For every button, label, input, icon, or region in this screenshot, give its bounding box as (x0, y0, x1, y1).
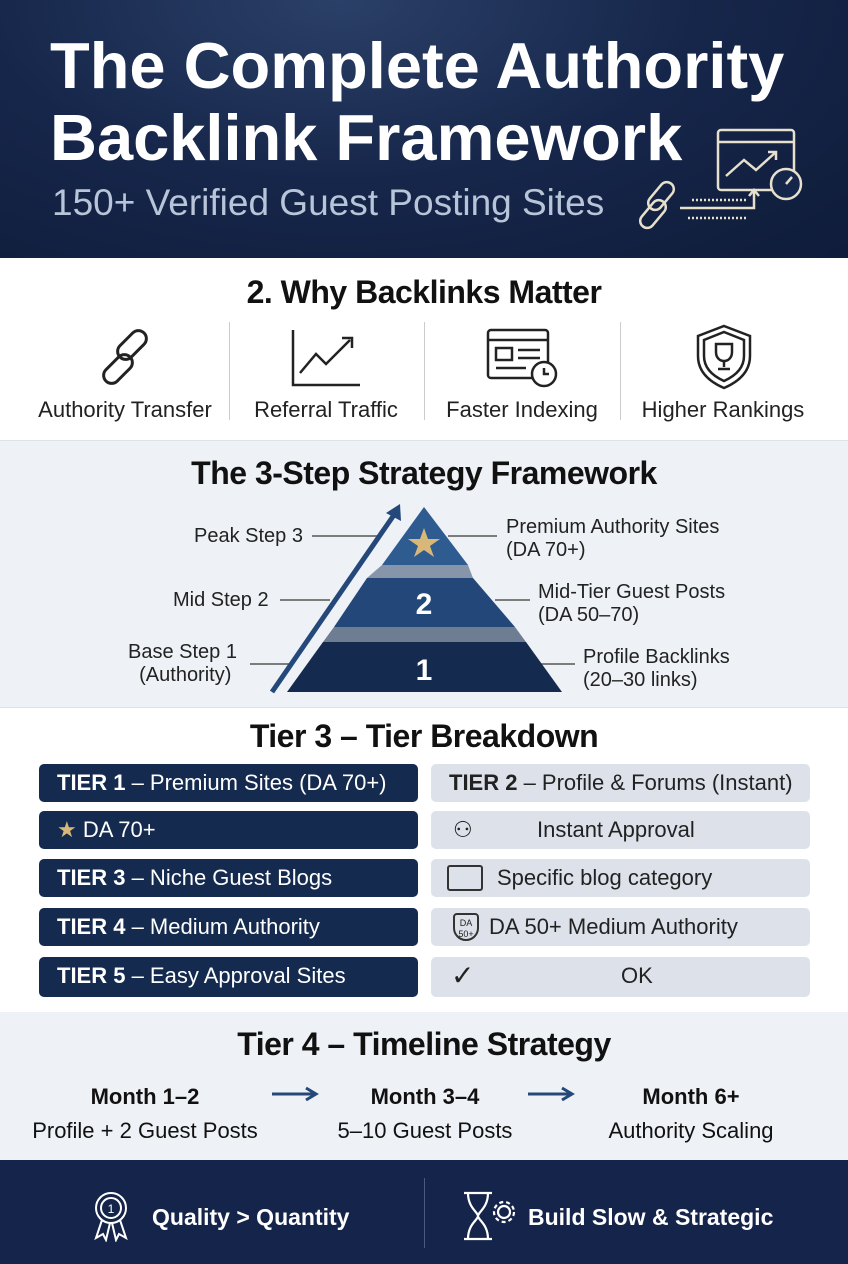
text: Instant Approval (537, 817, 695, 842)
pyramid labels right: Premium Authority Sites (506, 516, 719, 538)
text: ⚇ (453, 817, 473, 842)
text: Specific blog category (497, 865, 712, 890)
text: Mid-Tier Guest Posts (538, 581, 725, 603)
subtitle: 150+ Verified Guest Posting Sites (52, 182, 604, 223)
title (50, 29, 784, 174)
pyramid chart (250, 504, 575, 694)
text: Higher Rankings (642, 397, 804, 422)
header (0, 0, 848, 258)
heading: 2. Why Backlinks Matter (247, 274, 601, 310)
text: (DA 50–70) (538, 604, 639, 626)
icon: browser clock (486, 328, 558, 388)
text: Profile Backlinks (583, 646, 730, 668)
pyramid labels right: (DA 70+) (506, 539, 585, 561)
tier rows right: TIER 2 – Profile & Forums (Instant) (449, 770, 793, 795)
text: Faster Indexing (446, 397, 598, 422)
timeline steps: Profile + 2 Guest Posts (32, 1118, 258, 1143)
text: TIER 4 – Medium Authority (57, 914, 320, 939)
pyramid chart: 2 (416, 588, 432, 621)
title: The Complete Authority (50, 29, 784, 102)
icon: analytics with link (639, 128, 802, 230)
heading: tier breakdown: Tier 3 – Tier Breakdown (250, 718, 598, 754)
text: Base Step 1 (128, 641, 237, 663)
text: Mid Step 2 (173, 589, 269, 611)
footer text 1: Quality > Quantity (152, 1204, 349, 1230)
icon: hourglass gear (464, 1192, 516, 1240)
benefit labels: Authority Transfer (38, 397, 212, 422)
text: DA (460, 918, 472, 928)
text: OK (621, 963, 653, 988)
section: timeline: Month 6+ (642, 1084, 740, 1109)
text: (Authority) (139, 664, 231, 686)
text: 50+ (458, 929, 474, 939)
icon: link (102, 329, 148, 385)
section: timeline: Month 3–4 (371, 1084, 479, 1109)
text: TIER 5 – Easy Approval Sites (57, 963, 346, 988)
icon: chart (292, 330, 360, 386)
section: timeline: Authority Scaling (608, 1118, 774, 1143)
footer text 2: Build Slow & Strategic (528, 1204, 773, 1230)
section: timeline (0, 1012, 848, 1160)
section: 3-step strategy (0, 440, 848, 708)
section: why backlinks matter (0, 258, 848, 440)
icon: shield trophy (696, 324, 752, 390)
pyramid labels right (506, 516, 719, 561)
title: Backlink Framework (50, 101, 682, 174)
arrows (272, 1086, 575, 1102)
text: (20–30 links) (583, 669, 698, 691)
heading: Tier 4 – Timeline Strategy (237, 1026, 611, 1062)
text: ✓ (451, 960, 474, 991)
icon: medal (94, 1192, 128, 1242)
heading: The 3-Step Strategy Framework (191, 455, 657, 491)
text: ★ DA 70+ (57, 817, 156, 842)
pyramid labels left: Peak Step 3 (194, 525, 303, 547)
text: Referral Traffic (254, 397, 398, 422)
tier rows right (431, 764, 810, 802)
icon: medal: 1 (108, 1202, 115, 1216)
tier rows left (39, 764, 418, 802)
footer (0, 1160, 848, 1264)
timeline steps: Month 1–2 (91, 1084, 199, 1109)
timeline steps (32, 1084, 258, 1143)
pyramid chart: 1 (416, 654, 432, 687)
text: TIER 3 – Niche Guest Blogs (57, 865, 332, 890)
section: timeline: 5–10 Guest Posts (338, 1118, 512, 1143)
tier rows left: TIER 1 – Premium Sites (DA 70+) (57, 770, 387, 795)
text: DA 50+ Medium Authority (489, 914, 738, 939)
